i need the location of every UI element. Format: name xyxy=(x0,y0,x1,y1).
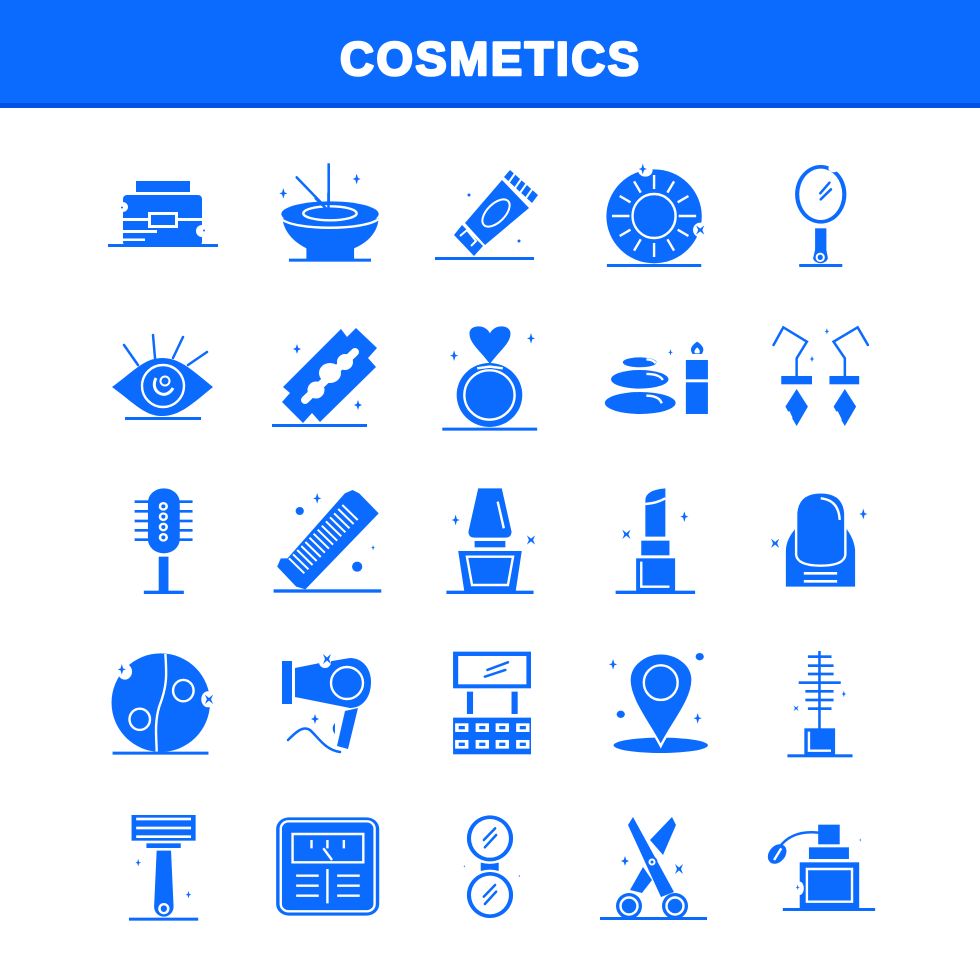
icon: comb xyxy=(274,490,381,593)
header banner xyxy=(0,0,980,108)
icon: hand mirror xyxy=(795,164,846,267)
icon: earrings xyxy=(774,327,868,426)
icon: razor blade xyxy=(272,328,377,427)
icon: eye xyxy=(112,335,213,420)
icon: spa stones and candle xyxy=(605,342,708,414)
icon: heart ring xyxy=(442,326,537,431)
icon rows 3 and 4 xyxy=(112,488,867,757)
icon: fingernail xyxy=(771,492,867,587)
icon: perfume bottle xyxy=(765,825,875,911)
icon: scissors xyxy=(600,817,707,920)
icon: cosmetic case xyxy=(108,181,218,247)
icon: weighing scale xyxy=(276,817,379,916)
icon: mascara wand xyxy=(787,651,853,757)
icon: vanity mirror with palette xyxy=(453,652,531,754)
redrawn icons in page coordinates xyxy=(108,170,707,920)
icon: safety razor xyxy=(129,815,198,921)
icon: nail polish xyxy=(446,488,535,594)
icon: hair dryer xyxy=(282,654,371,752)
icon: bowl with sticks xyxy=(279,163,379,262)
icon: sun compact xyxy=(606,164,707,267)
icon: face mask sphere xyxy=(112,653,215,755)
icon: hair brush xyxy=(135,488,193,594)
icon rows 1 and 2 xyxy=(279,163,868,431)
title: COSMETICS xyxy=(340,32,639,85)
icon: double compact mirror xyxy=(463,815,520,918)
icon: cream tube xyxy=(435,170,538,260)
icon row 5 xyxy=(129,815,875,921)
icon: lipstick xyxy=(616,488,695,594)
icon: location pin xyxy=(609,653,708,753)
